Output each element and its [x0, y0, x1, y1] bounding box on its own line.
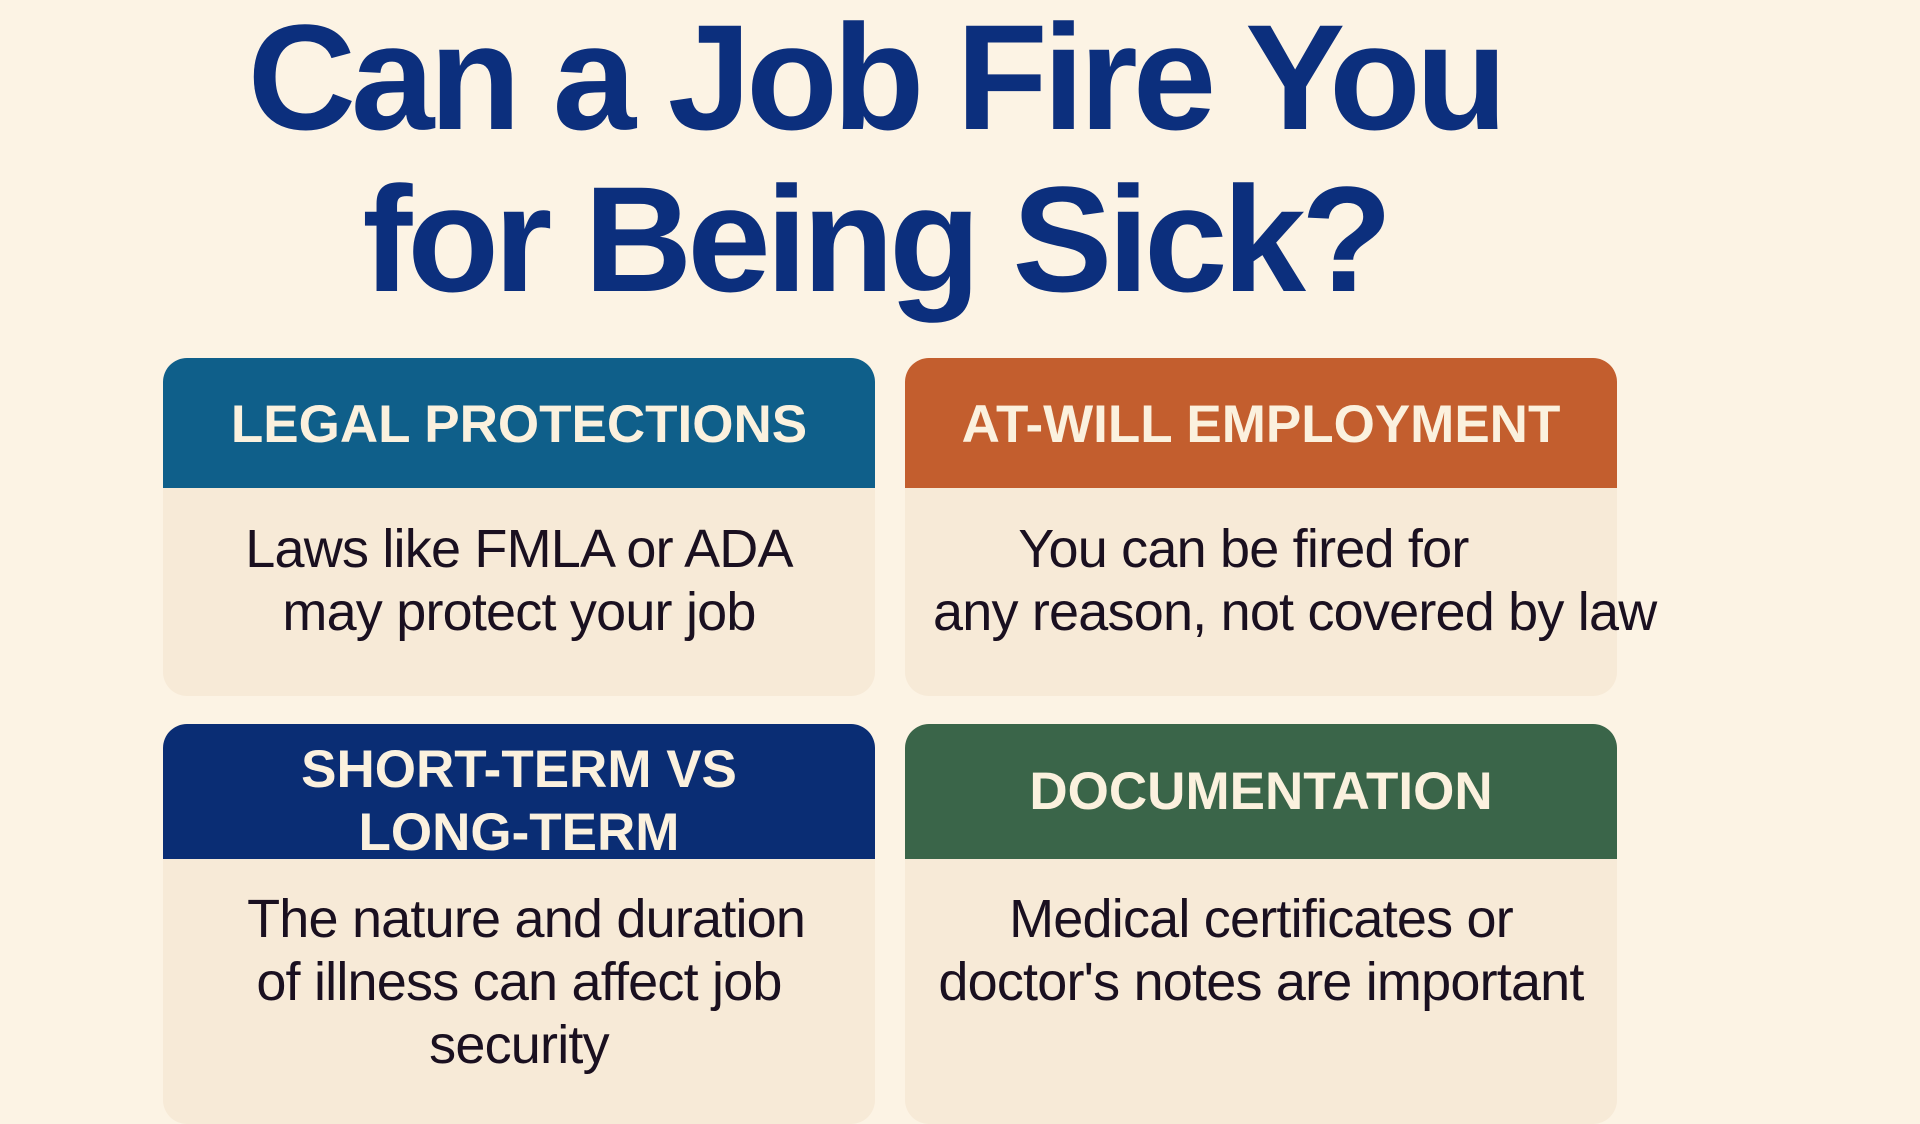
text: legal protections: Laws like FMLA or ADA [245, 519, 793, 579]
header: legal protections: LEGAL PROTECTIONS [231, 395, 807, 454]
title [248, 0, 1502, 323]
text: short-term vs long-term: security [429, 1015, 609, 1075]
text: short-term vs long-term: The nature and duration [247, 889, 805, 949]
text: documentation: doctor's notes are important [938, 952, 1584, 1012]
header: at-will employment [905, 358, 1617, 488]
text: documentation: Medical certificates or [1009, 889, 1513, 949]
header: legal protections [163, 358, 875, 488]
header: documentation [905, 724, 1617, 859]
text: short-term vs long-term [247, 889, 805, 1075]
text: at-will employment: any reason, not covered by law [933, 582, 1656, 642]
text: documentation [938, 889, 1584, 1012]
header: short-term vs long-term: LONG-TERM [359, 803, 679, 862]
text: legal protections [245, 519, 794, 642]
text: short-term vs long-term: of illness can affect job [256, 952, 782, 1012]
panel: short-term vs long-term [163, 724, 875, 1124]
panel: at-will employment [905, 358, 1617, 696]
text: at-will employment [933, 519, 1658, 642]
header: short-term vs long-term [163, 724, 875, 859]
header: documentation: DOCUMENTATION [1029, 762, 1493, 821]
title: for Being Sick? [362, 155, 1388, 323]
text: at-will employment: You can be fired for [1018, 519, 1469, 579]
header: short-term vs long-term: SHORT-TERM VS [301, 740, 737, 799]
panel: legal protections [163, 358, 875, 696]
text: legal protections: may protect your job [282, 582, 756, 642]
panel: documentation [905, 724, 1617, 1124]
header: at-will employment: AT-WILL EMPLOYMENT [962, 395, 1560, 454]
